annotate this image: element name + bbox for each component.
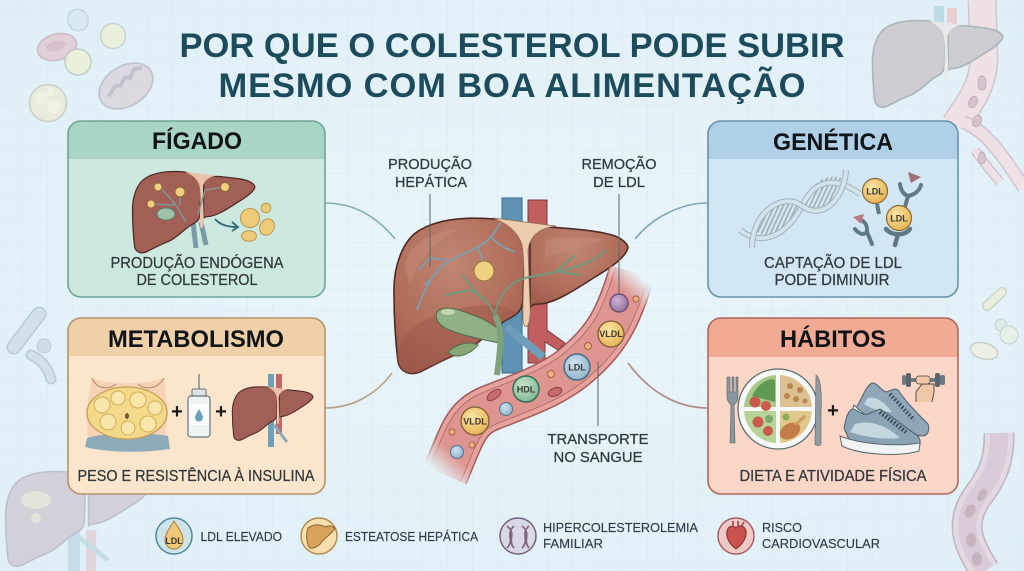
- label: VLDL particle: [598, 321, 624, 347]
- legend item: esteatose hepática: ESTEATOSE HEPÁTICA: [345, 529, 478, 544]
- gallbladder: [436, 308, 503, 356]
- central illustration: liver and vessel: [394, 198, 639, 475]
- icon: LDL receptors: LDL: [866, 186, 884, 196]
- decorative cells right: [968, 292, 1018, 362]
- decorative cells top left: [30, 6, 161, 122]
- decorative liver and vessel top right: [873, 0, 1024, 188]
- plus: +: [827, 400, 839, 422]
- panel: hábitos: [708, 318, 958, 494]
- decorative vessel bottom right: [962, 433, 999, 571]
- legend item: hipercolesterolemia familiar: [500, 518, 698, 554]
- plus: +: [215, 401, 227, 423]
- legend item: esteatose hepática: [301, 518, 478, 554]
- arrow: [215, 219, 238, 231]
- portal branch: [507, 327, 543, 357]
- icon: fork: [727, 377, 738, 443]
- vessel particles: [449, 294, 639, 458]
- panel: metabolismo: [68, 318, 325, 494]
- label: PESO E RESISTÊNCIA À INSULINA: [78, 468, 315, 485]
- callout: transporte no sangue: NO SANGUE: [554, 449, 642, 466]
- callout: transporte no sangue: [548, 362, 648, 466]
- label: VLDL particle lower: VLDL: [463, 416, 487, 426]
- legend item: LDL elevado: LDL ELEVADO: [200, 529, 282, 544]
- legend item: hipercolesterolemia familiar: HIPERCOLESTEROLEMIA: [543, 520, 698, 535]
- icon: belly: [85, 378, 170, 452]
- fat deposit: [474, 261, 494, 281]
- heading: genética: GENÉTICA: [773, 128, 893, 156]
- callout: remoção de LDL: REMOÇÃO: [582, 156, 656, 173]
- callout: remoção de LDL: [582, 156, 656, 294]
- callout: produção hepática: PRODUÇÃO: [388, 156, 472, 173]
- label: LDL particle: [564, 354, 590, 380]
- label: HDL particle: [513, 376, 539, 402]
- label: [764, 255, 902, 289]
- aorta: [528, 200, 565, 363]
- heading: hábitos: HÁBITOS: [780, 325, 886, 353]
- decorative liver bottom left: [6, 472, 148, 571]
- legend item: risco cardiovascular: [718, 518, 880, 554]
- legend: [156, 518, 880, 554]
- callout: produção hepática: HEPÁTICA: [395, 174, 467, 191]
- icon: liver small: [232, 374, 313, 447]
- connector: metabolismo: [325, 373, 392, 408]
- icon: sneakers: [840, 383, 929, 454]
- icon: liver with cholesterol: [132, 171, 255, 253]
- green ducts: [445, 250, 605, 372]
- title: MESMO COM BOA ALIMENTAÇÃO: [218, 66, 806, 105]
- connector: genética: [635, 203, 708, 239]
- label: DIETA E ATIVIDADE FÍSICA: [740, 468, 927, 485]
- heading: metabolismo: METABOLISMO: [108, 326, 284, 353]
- blood vessel: [445, 272, 632, 475]
- label: PODE DIMINUIR: [774, 272, 890, 289]
- legend item: risco cardiovascular: RISCO: [762, 520, 802, 535]
- icon: DNA helix: [740, 170, 860, 248]
- title: POR QUE O COLESTEROL PODE SUBIR: [180, 27, 845, 65]
- label: HDL particle: HDL: [517, 384, 536, 394]
- legend item: hipercolesterolemia familiar: FAMILIAR: [543, 536, 603, 551]
- label: VLDL particle: VLDL: [599, 329, 623, 339]
- icon: fat blobs: [240, 203, 277, 241]
- panel: fígado: [68, 121, 325, 297]
- heading: fígado: FÍGADO: [152, 127, 242, 155]
- icon: dumbbell in hand: [902, 373, 945, 402]
- callout: produção hepática: [388, 156, 472, 267]
- ligament: [493, 218, 556, 327]
- icon: LDL receptors: LDL: [890, 214, 908, 224]
- connector: hábitos: [628, 363, 708, 408]
- connector: fígado: [325, 203, 395, 239]
- panel: genética: [708, 121, 958, 297]
- label: PRODUÇÃO ENDÓGENA: [110, 255, 284, 272]
- legend item: risco cardiovascular: CARDIOVASCULAR: [762, 536, 880, 551]
- icon: knife: [815, 375, 821, 446]
- label: [110, 255, 284, 289]
- liver lobes: [394, 218, 628, 374]
- icon: insulin vial: [188, 374, 210, 437]
- label: LDL particle: LDL: [568, 362, 586, 372]
- icon: LDL receptors: [853, 172, 921, 245]
- callout: remoção de LDL: DE LDL: [593, 174, 645, 191]
- blue veins: [417, 223, 515, 310]
- title: [180, 27, 845, 105]
- legend item: LDL elevado: LDL: [165, 536, 183, 546]
- plus: +: [171, 401, 183, 423]
- vena cava: [502, 198, 522, 373]
- callout: transporte no sangue: TRANSPORTE: [548, 431, 648, 448]
- label: CAPTAÇÃO DE LDL: [764, 255, 902, 272]
- decorative bacteria left: [14, 314, 51, 379]
- label: DE COLESTEROL: [136, 272, 258, 289]
- icon: plate: [738, 369, 818, 449]
- legend item: LDL elevado: [156, 518, 282, 554]
- label: VLDL particle lower: [461, 407, 489, 435]
